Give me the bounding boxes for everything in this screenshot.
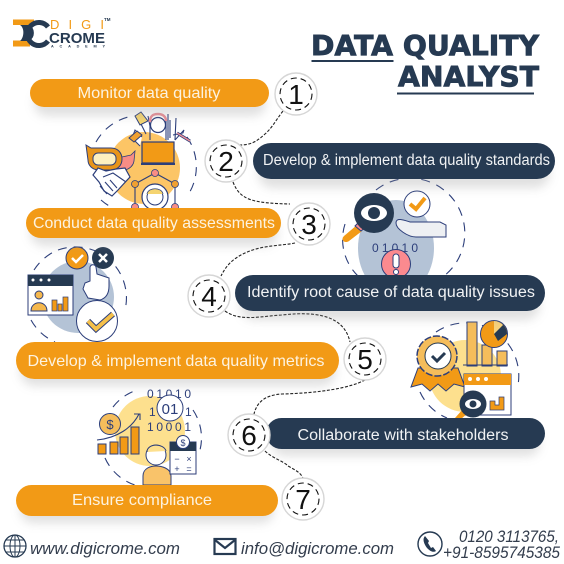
icon: compliance finance illustration	[97, 387, 201, 485]
step 5: 5	[357, 344, 373, 375]
icon: compliance finance illustration: 10001	[147, 420, 191, 434]
icon: compliance finance illustration: 01010	[147, 387, 191, 401]
pill: conduct assessments	[26, 208, 281, 246]
pill: collaborate with stakeholders: Collaborate with stakeholders	[298, 427, 509, 444]
pill: identify root cause: Identify root cause of data quality issues	[247, 284, 535, 301]
logo	[13, 17, 111, 48]
icon: magnifier and data alert illustration	[343, 178, 465, 296]
icon: compliance finance illustration: $	[106, 417, 114, 432]
pill: collaborate with stakeholders	[266, 418, 545, 456]
step 7: 7	[295, 484, 311, 515]
step 2	[205, 140, 247, 182]
icon: magnifier and data alert illustration: 01010	[372, 241, 418, 255]
step 6: 6	[241, 420, 257, 451]
step 4: 4	[201, 281, 217, 312]
icon: compliance finance illustration: $	[180, 438, 186, 448]
title: DATA QUALITY	[311, 29, 540, 62]
icon: compliance finance illustration: ×	[186, 454, 192, 464]
step 2: 2	[218, 146, 234, 177]
footer: phone	[418, 528, 561, 562]
footer: email: info@digicrome.com	[241, 540, 394, 558]
icon: compliance finance illustration: 1	[185, 405, 192, 419]
pill: monitor data quality: Monitor data quality	[78, 85, 220, 102]
pill: monitor data quality	[30, 79, 269, 116]
step 3	[288, 203, 330, 245]
logo: ACADEMY	[51, 44, 105, 48]
pill: ensure compliance	[16, 485, 278, 523]
icon: compliance finance illustration: +	[174, 464, 180, 474]
step 1	[275, 73, 317, 115]
logo: DIGI	[50, 17, 104, 32]
pill: conduct assessments: Conduct data quality assessments	[33, 215, 275, 232]
icon: award and chart illustration	[411, 320, 519, 419]
icon: metrics dashboard illustration	[28, 247, 126, 342]
pill: identify root cause	[235, 275, 545, 320]
pill: develop and implement standards	[253, 143, 555, 188]
step 4	[188, 275, 230, 317]
title: ANALYST	[398, 60, 539, 93]
pill: ensure compliance: Ensure compliance	[72, 492, 212, 509]
logo: CROME	[49, 30, 105, 47]
step 3: 3	[301, 209, 317, 240]
icon: monitor data quality team illustration	[86, 112, 196, 210]
pill: develop metrics: Develop & implement data quality metrics	[28, 353, 324, 370]
footer: website: www.digicrome.com	[30, 540, 180, 558]
pill: develop metrics	[16, 342, 339, 386]
step 5	[344, 338, 386, 380]
icon: compliance finance illustration: 1	[149, 405, 156, 419]
icon: compliance finance illustration: −	[174, 454, 180, 464]
title	[311, 29, 540, 94]
footer: website	[4, 535, 180, 558]
connectors between numbered steps	[221, 111, 365, 478]
logo: TM	[104, 17, 111, 22]
step 6	[228, 414, 270, 456]
pill: develop and implement standards: Develop & implement data quality standards	[263, 152, 550, 169]
step 1: 1	[288, 79, 304, 110]
icon: compliance finance illustration: =	[186, 464, 192, 474]
step 7	[282, 478, 324, 520]
icon: compliance finance illustration: 01	[162, 401, 178, 418]
